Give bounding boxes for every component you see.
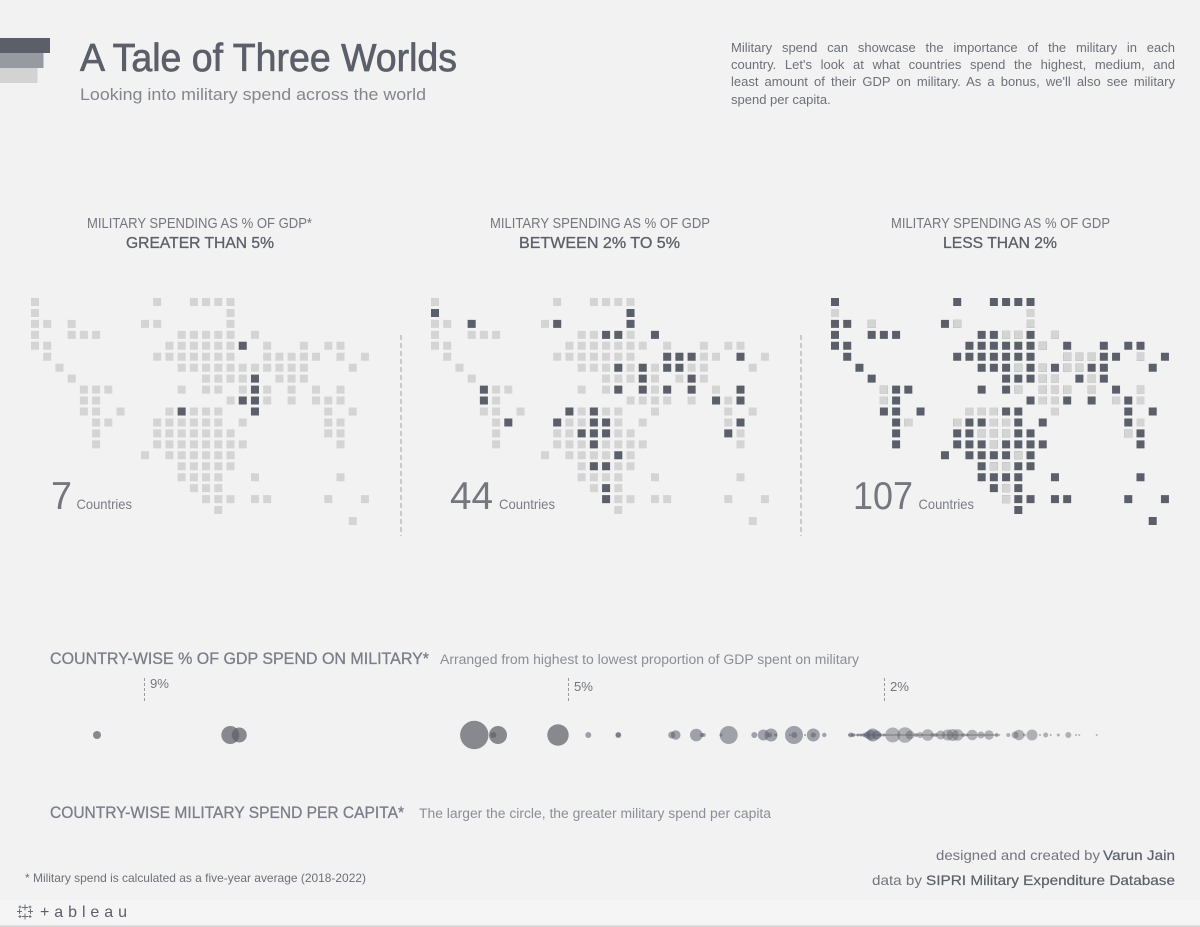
credits [872, 847, 1175, 888]
note: arrangement: Arranged from highest to lowest proportion of GDP spent on military [440, 652, 859, 667]
count: 44 countries: 44 [450, 475, 493, 518]
panel: greater than 5% [31, 216, 369, 525]
heading: GDP share: COUNTRY-WISE % OF GDP SPEND ON MILITARY* [50, 649, 429, 668]
heading: greater than 5%: GREATER THAN 5% [126, 235, 274, 252]
logo: stacked bars [0, 38, 50, 83]
tableau wordmark: +ableau [40, 904, 127, 921]
bubble axis labels [144, 676, 909, 702]
intro paragraph: Military spend can showcase the importance of the military in each [731, 40, 1175, 55]
heading: per capita: COUNTRY-WISE MILITARY SPEND PER CAPITA* [50, 803, 404, 822]
count: 44 countries: Countries [499, 496, 555, 512]
bubble axis labels: 2% [890, 679, 909, 694]
count: 7 countries [51, 475, 132, 518]
panel: less than 2% [831, 216, 1169, 525]
footer bar [0, 900, 1200, 927]
bubble axis labels: 9% [150, 676, 169, 691]
heading: less than 2%: MILITARY SPENDING AS % OF GDP [891, 216, 1110, 232]
tile map: between 2% to 5% [431, 298, 769, 525]
intro paragraph [731, 40, 1175, 107]
bubble chart: countries by GDP share, size by per capita spend [93, 721, 1098, 749]
divider [400, 335, 402, 536]
heading: less than 2%: LESS THAN 2% [943, 235, 1057, 252]
credits: data by [872, 872, 922, 888]
panel: between 2% to 5% [431, 216, 769, 525]
divider [800, 335, 802, 536]
icon: tableau mark [17, 904, 33, 920]
intro paragraph: country. Let's look at what countries spend the highest, medium, and [731, 57, 1175, 72]
credits: SIPRI Military Expenditure Database [926, 872, 1175, 888]
footnote: * Military spend is calculated as a five-year average (2018-2022) [25, 871, 366, 885]
credits: designed and created by [936, 847, 1100, 863]
tile map: greater than 5% [31, 298, 369, 525]
heading: less than 2% [891, 216, 1110, 252]
intro paragraph: least amount of their GDP on military. As a bonus, we'll also see military [731, 74, 1175, 89]
footer rule [0, 926, 1200, 927]
count: 107 countries [853, 475, 974, 518]
heading: between 2% to 5%: MILITARY SPENDING AS % OF GDP [490, 216, 710, 232]
note: circle size: The larger the circle, the greater military spend per capita [419, 806, 771, 821]
subtitle: Looking into military spend across the world [80, 85, 426, 104]
heading: greater than 5% [87, 216, 312, 252]
credits: Varun Jain [1103, 847, 1175, 863]
title: A Tale of Three Worlds [80, 37, 457, 80]
count: 107 countries: 107 [853, 475, 913, 518]
count: 107 countries: Countries [918, 496, 974, 512]
tile map: less than 2% [831, 298, 1169, 525]
intro paragraph: spend per capita. [731, 92, 831, 107]
heading: between 2% to 5%: BETWEEN 2% TO 5% [519, 235, 680, 252]
count: 7 countries: Countries [76, 496, 132, 512]
count: 7 countries: 7 [51, 475, 72, 518]
heading: between 2% to 5% [490, 216, 710, 252]
bubble axis labels: 5% [574, 679, 593, 694]
heading: greater than 5%: MILITARY SPENDING AS % OF GDP* [87, 216, 312, 232]
count: 44 countries [450, 475, 555, 518]
